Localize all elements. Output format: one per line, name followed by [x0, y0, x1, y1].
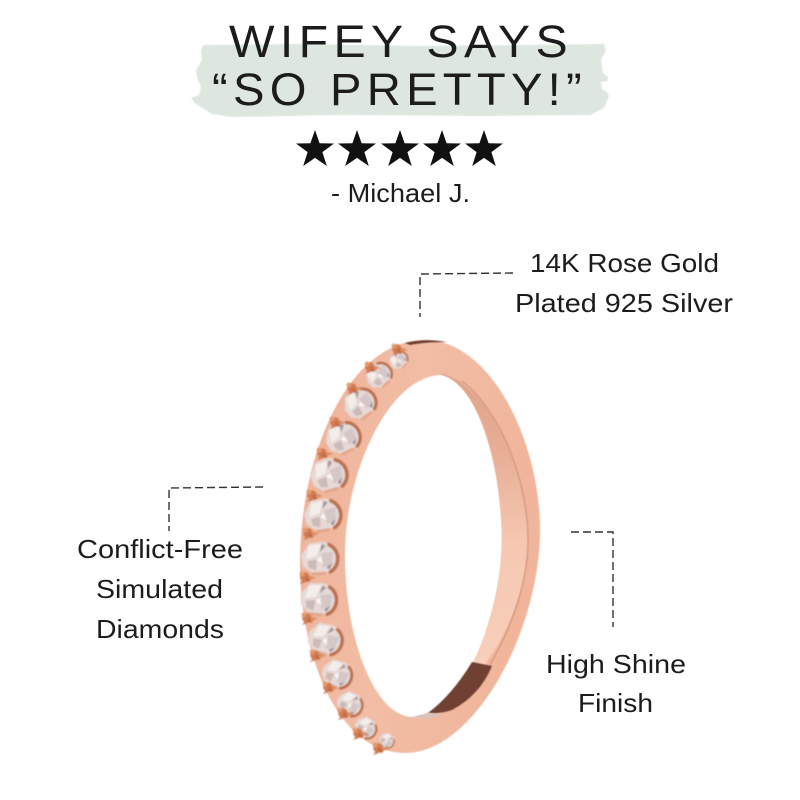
label: metal [515, 248, 733, 318]
dashed leader: finish [571, 532, 613, 627]
label: metal: 14K Rose Gold [530, 248, 719, 278]
rose gold ring [299, 340, 540, 755]
reviewer name: - Michael J. [331, 178, 470, 208]
dashed leader: diamonds [169, 487, 263, 531]
label: diamonds: Diamonds [96, 614, 224, 644]
dashed leader: metal [420, 273, 513, 317]
label: finish: Finish [578, 688, 653, 718]
label: diamonds: Simulated [96, 574, 223, 604]
inner wall crease line [462, 381, 528, 665]
label: finish: High Shine [546, 649, 686, 679]
label: finish [546, 649, 686, 718]
callout: diamonds [77, 487, 263, 644]
five star rating [296, 130, 503, 166]
title [212, 16, 587, 115]
callout: metal [420, 248, 733, 318]
ring inner wall [413, 373, 528, 718]
callout: finish [546, 532, 686, 718]
label: diamonds [77, 534, 243, 644]
brush stroke highlight [191, 44, 609, 117]
dark top shadow [405, 340, 447, 345]
prongs [300, 344, 408, 755]
label: metal: Plated 925 Silver [515, 288, 733, 318]
ring outer face [300, 340, 540, 753]
pale reflection tail [412, 713, 445, 719]
label: diamonds: Conflict-Free [77, 534, 243, 564]
title: “SO PRETTY!” [212, 64, 587, 115]
title: WIFEY SAYS [229, 16, 573, 67]
diamonds [299, 348, 411, 751]
dark reflection inside band [428, 662, 492, 713]
stones row [299, 344, 411, 755]
